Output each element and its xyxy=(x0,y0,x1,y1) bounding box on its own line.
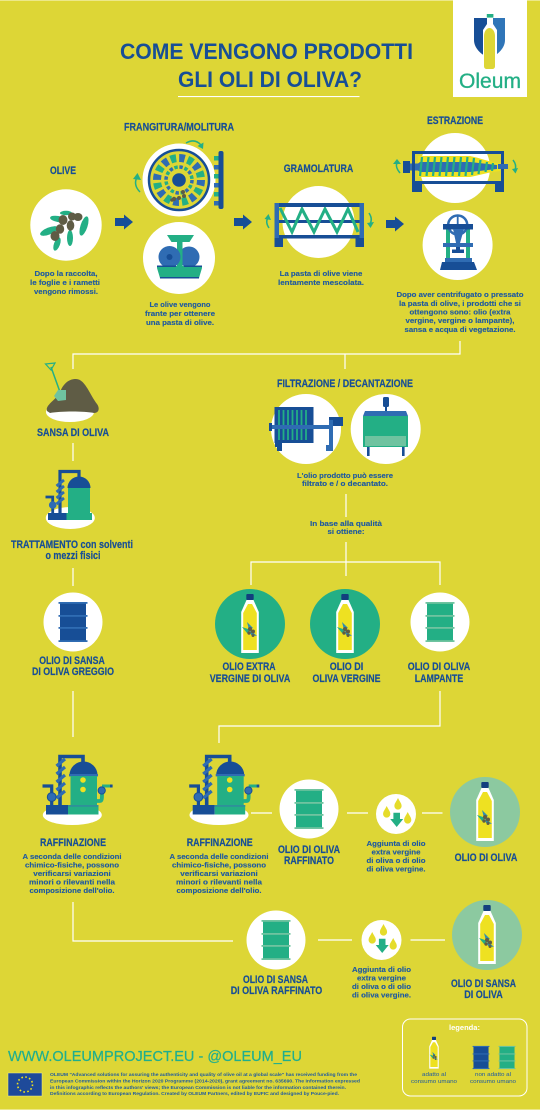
raffinazione 1: RAFFINAZIONE xyxy=(40,837,106,849)
olio di oliva raffinato: OLIO DI OLIVA xyxy=(278,844,340,856)
quality note: si ottiene: xyxy=(328,527,364,536)
raffinazione 2: minori o rilevanti nella xyxy=(176,878,263,886)
aggiunta di olio 1 xyxy=(366,794,426,874)
raffinazione 2 xyxy=(170,756,268,895)
icon: solvent treatment plant xyxy=(46,472,95,529)
filtrazione / decantazione: FILTRAZIONE / DECANTAZIONE xyxy=(277,378,413,390)
icon: olive press xyxy=(423,210,493,280)
step: estrazione: la pasta di olive, i prodotti che si xyxy=(399,299,521,308)
aggiunta di olio 2 xyxy=(352,920,412,1000)
raffinazione 1: composizione dell'olio. xyxy=(30,886,114,895)
aggiunta di olio 1: Aggiunta di olio xyxy=(366,839,426,848)
olio di oliva lampante: OLIO DI OLIVA xyxy=(408,661,470,673)
icon: bottle xyxy=(476,782,494,841)
olio di oliva lampante xyxy=(408,592,470,685)
olio extra vergine di oliva: VERGINE DI OLIVA xyxy=(210,673,290,685)
arrow xyxy=(234,214,252,230)
raffinazione 2: chimico-fisiche, possono xyxy=(172,860,267,870)
icon: decanting tank xyxy=(363,397,408,456)
olio di oliva vergine: OLIVA VERGINE xyxy=(312,673,380,685)
filtrazione / decantazione: filtrato e / o decantato. xyxy=(302,479,388,488)
icon: bottle xyxy=(478,905,496,964)
olio di sansa di oliva raffinato: OLIO DI SANSA xyxy=(243,974,308,986)
olio di oliva raffinato: RAFFINATO xyxy=(284,855,334,867)
step: estrazione: ottengono sono: olio (extra xyxy=(410,308,512,316)
legend: blue barrel xyxy=(473,1046,489,1069)
funding statement: OLEUM "Advanced solutions for assuring the authenticity and quality of olive oil at a global scale" has received funding from the xyxy=(50,1072,358,1077)
step: frangitura / molitura xyxy=(124,122,234,327)
title xyxy=(120,39,413,97)
olio di sansa di oliva greggio: DI OLIVA GREGGIO xyxy=(32,666,114,678)
legend: consumo umano xyxy=(470,1079,516,1085)
aggiunta di olio 2: di oliva vergine. xyxy=(352,990,411,1000)
icon: drops xyxy=(376,794,416,834)
icon: filter press xyxy=(269,407,343,451)
quality note xyxy=(310,519,383,536)
step: frangitura / molitura: una pasta di olive. xyxy=(146,318,214,327)
aggiunta di olio 2: Aggiunta di olio xyxy=(352,965,412,974)
step: frangitura / molitura: FRANGITURA/MOLITURA xyxy=(124,122,234,134)
step: olive: Dopo la raccolta, xyxy=(34,269,98,278)
logo: Oleum: Oleum xyxy=(459,70,521,93)
funding statement: Definitions according to European Regulation. Created by OLEUM Partners, edited by EUFIC and designed by Pouce-pied. xyxy=(50,1091,339,1096)
aggiunta di olio 1: extra vergine xyxy=(372,848,420,856)
olio extra vergine di oliva xyxy=(210,589,290,685)
sansa di oliva xyxy=(37,363,109,439)
olio di oliva lampante: LAMPANTE xyxy=(415,673,463,685)
olio di sansa di oliva: DI OLIVA xyxy=(464,989,503,1001)
step: olive xyxy=(30,165,102,296)
icon: olive branch xyxy=(39,211,90,252)
legend: non adatto al xyxy=(475,1072,511,1078)
step: estrazione: Dopo aver centrifugato o pressato xyxy=(396,290,524,299)
olio di oliva vergine: OLIO DI xyxy=(330,661,363,673)
icon: pomace pile with shovel xyxy=(46,363,99,422)
raffinazione 2: RAFFINAZIONE xyxy=(187,837,253,849)
step: olive: OLIVE xyxy=(50,165,76,177)
step: olive: vengono rimossi. xyxy=(34,287,98,296)
olio di oliva raffinato xyxy=(278,780,340,867)
olio di oliva: OLIO DI OLIVA xyxy=(455,852,518,864)
step: gramolatura: lentamente mescolata. xyxy=(278,278,364,287)
legend: consumo umano xyxy=(411,1079,457,1085)
icon: malaxer xyxy=(264,203,374,247)
quality note: In base alla qualità xyxy=(310,519,383,528)
arrow xyxy=(115,214,133,230)
olio di sansa di oliva raffinato xyxy=(231,910,322,997)
step: estrazione: vergine, vergine o lampante), xyxy=(406,316,514,325)
website and handle: WWW.OLEUMPROJECT.EU - @OLEUM_EU xyxy=(8,1048,302,1065)
trattamento xyxy=(11,472,133,562)
filtrazione / decantazione: L'olio prodotto può essere xyxy=(297,471,393,480)
aggiunta di olio 1: di oliva o di olio xyxy=(366,856,426,865)
raffinazione 1: chimico-fisiche, possono xyxy=(25,860,120,870)
icon: decanter centrifuge xyxy=(393,152,518,192)
icon: green barrel xyxy=(426,602,454,642)
raffinazione 1: minori o rilevanti nella xyxy=(29,878,116,886)
olio di sansa di oliva greggio xyxy=(32,592,114,678)
trattamento: o mezzi fisici xyxy=(46,550,100,562)
step: estrazione xyxy=(393,115,524,334)
raffinazione 1 xyxy=(22,756,122,895)
raffinazione 2: A seconda delle condizioni xyxy=(170,852,268,861)
legend: bottle xyxy=(429,1037,439,1069)
legend: adatto al xyxy=(422,1072,446,1078)
icon: blue barrel xyxy=(58,602,88,642)
olio di oliva vergine xyxy=(310,589,380,685)
aggiunta di olio 1: di oliva vergine. xyxy=(366,864,426,874)
icon: EU flag xyxy=(8,1073,42,1096)
step: estrazione: ESTRAZIONE xyxy=(427,115,483,127)
title: COME VENGONO PRODOTTI xyxy=(120,39,413,64)
logo: Oleum xyxy=(453,0,527,97)
olio di oliva xyxy=(450,777,520,864)
step: gramolatura: La pasta di olive viene xyxy=(280,269,362,278)
step: gramolatura: GRAMOLATURA xyxy=(284,163,353,175)
step: gramolatura xyxy=(264,163,374,287)
aggiunta di olio 2: extra vergine xyxy=(357,974,406,982)
sansa di oliva: SANSA DI OLIVA xyxy=(37,427,109,439)
icon: bottle xyxy=(336,594,354,653)
legend xyxy=(402,1019,527,1096)
step: frangitura / molitura: frante per ottenere xyxy=(145,309,215,318)
filtrazione / decantazione xyxy=(269,378,421,488)
funding statement: European Commission within the Horizon 2020 Programme (2014-2020), grant agreement no. 635690. The information expressed xyxy=(50,1078,360,1084)
icon: bottle xyxy=(241,594,259,653)
funding statement xyxy=(50,1072,360,1096)
olio extra vergine di oliva: OLIO EXTRA xyxy=(222,661,276,673)
aggiunta di olio 2: di oliva o di olio xyxy=(352,982,412,991)
olio di sansa di oliva: OLIO DI SANSA xyxy=(451,978,516,990)
arrow xyxy=(386,216,404,232)
legend: legenda: xyxy=(449,1025,480,1032)
step: estrazione: sansa e acqua di vegetazione. xyxy=(404,325,516,334)
raffinazione 1: A seconda delle condizioni xyxy=(22,852,122,861)
icon: green barrel xyxy=(262,920,290,960)
olio di sansa di oliva raffinato: DI OLIVA RAFFINATO xyxy=(231,985,322,997)
olio di sansa di oliva xyxy=(451,900,522,1001)
raffinazione 2: verificarsi variazioni xyxy=(180,869,258,878)
title: GLI OLI DI OLIVA? xyxy=(178,67,362,92)
trattamento: TRATTAMENTO con solventi xyxy=(11,539,133,551)
icon: refinery xyxy=(189,756,259,825)
icon: olive mill xyxy=(143,222,215,294)
icon: refinery xyxy=(42,756,113,825)
legend: green barrel xyxy=(499,1046,515,1069)
raffinazione 1: verificarsi variazioni xyxy=(33,869,111,878)
step: olive: le foglie e i rametti xyxy=(30,278,100,287)
connector lines xyxy=(73,341,460,941)
icon: green barrel xyxy=(294,789,324,829)
funding statement: in this infographic reflects the authors' views; the European Commission is not liable for the information contained therein. xyxy=(50,1085,346,1090)
olio di sansa di oliva greggio: OLIO DI SANSA xyxy=(39,655,105,667)
raffinazione 2: composizione dell'olio. xyxy=(176,886,262,895)
icon: drops xyxy=(362,920,402,960)
icon: milling wheel xyxy=(133,141,224,216)
step: frangitura / molitura: Le olive vengono xyxy=(150,300,211,309)
